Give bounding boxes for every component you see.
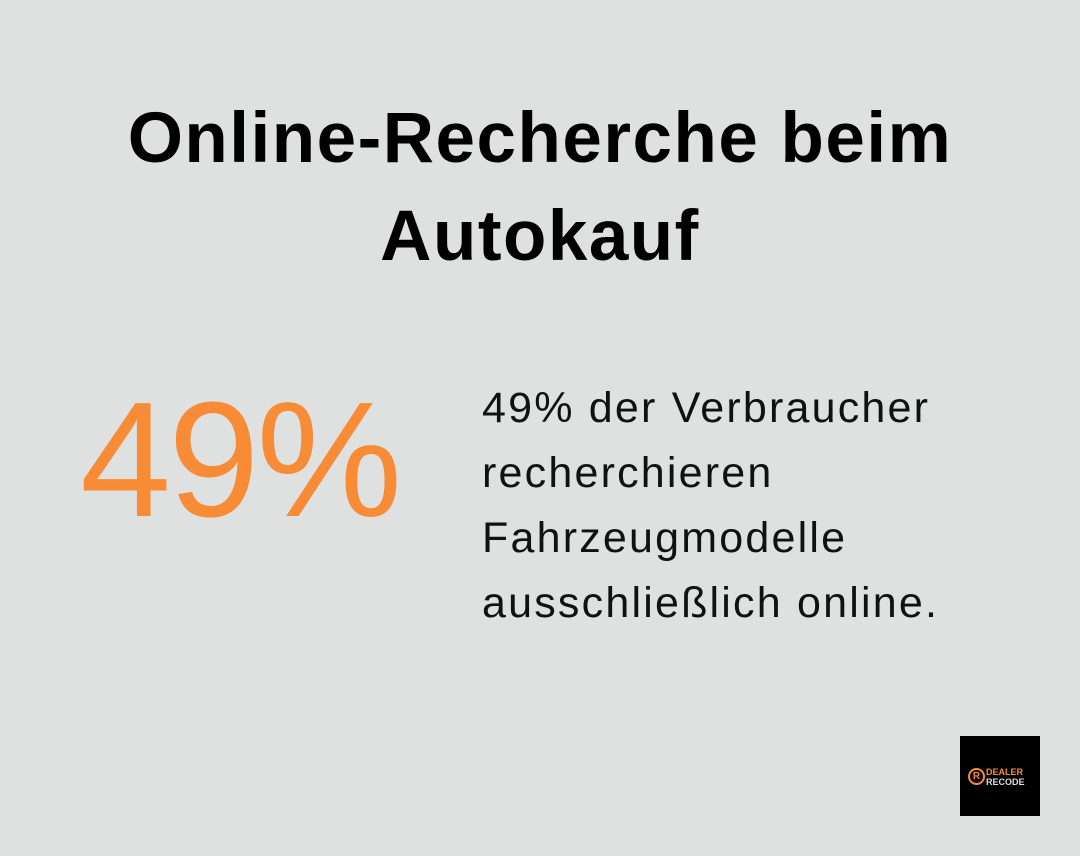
description: ausschließlich online. — [482, 579, 939, 627]
stat number: 49% — [80, 368, 399, 551]
description: Fahrzeugmodelle — [482, 514, 847, 562]
icon: R circle: R — [973, 771, 980, 782]
description: recherchieren — [482, 449, 774, 497]
icon: R circle — [968, 768, 985, 785]
description: 49% der Verbraucher — [482, 384, 930, 432]
logo — [960, 736, 1040, 816]
logo text: RECODE — [986, 777, 1025, 787]
logo text: DEALER — [986, 767, 1023, 777]
title: Autokauf — [380, 197, 700, 276]
description — [482, 384, 939, 627]
title: Online-Recherche beim — [128, 99, 952, 178]
title — [128, 99, 952, 276]
logo text — [986, 767, 1025, 787]
